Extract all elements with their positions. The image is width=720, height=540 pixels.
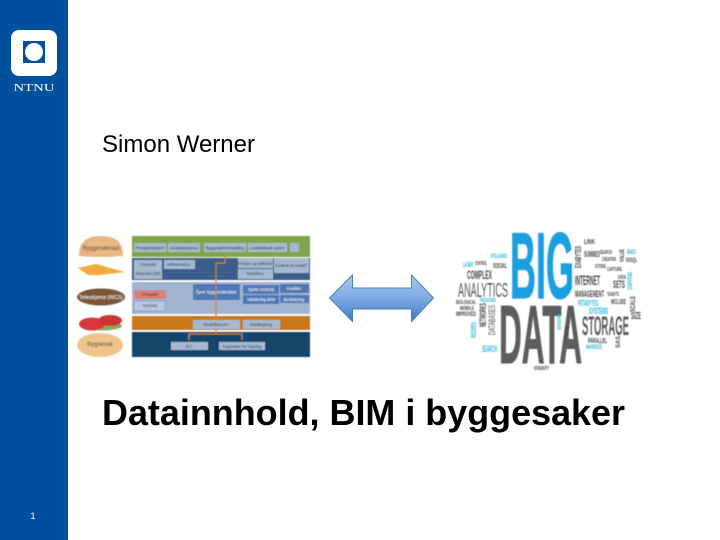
cyan words: RECORDS (471, 322, 478, 338)
top bun: Byggesøknad (83, 246, 119, 252)
burger illustration (77, 236, 125, 357)
page number: 1 (30, 511, 36, 521)
surrounding words: PARALLEL (588, 338, 607, 345)
big data word cloud: BIG (510, 213, 574, 318)
title: Datainnhold, BIM i byggesaker (102, 392, 625, 433)
bottom bun: Bygsesak (87, 342, 114, 348)
surrounding words: CREATION (602, 257, 616, 263)
author name: Simon Werner (102, 131, 255, 158)
surrounding words: DATA (618, 275, 626, 281)
green layer: Landsdekkende system (250, 246, 285, 250)
slide canvas: SIZE (631, 311, 641, 322)
sidebar (0, 0, 68, 540)
slide canvas: STORAGE (582, 311, 629, 341)
surrounding words: BIOLOGICAL (456, 300, 476, 306)
cyan words: BIG (627, 250, 636, 256)
orange layer: Datalagring (250, 322, 273, 327)
dark blue layer: Tellesystem (BIM) (136, 271, 161, 276)
light blue layer: Verktøy (143, 303, 158, 308)
double arrow (330, 275, 434, 322)
surrounding words: LARGE (565, 325, 571, 340)
big data word cloud (456, 213, 641, 381)
cyan words: COMPUTING (628, 272, 634, 290)
surrounding words: COMPLEX (467, 268, 492, 282)
patty: Telleskjema (WCS) (79, 295, 123, 301)
cyan words: PETABYTES (578, 299, 598, 308)
surrounding words: DIVERSITY (534, 366, 549, 372)
dark blue layer: Innsyn og søknad (238, 261, 273, 266)
light blue layer: Prosjekt (142, 292, 159, 297)
NTNU logo: NTNU (14, 83, 55, 94)
navy layer: IFC (185, 344, 193, 349)
architecture diagram (132, 236, 310, 357)
light blue layer (132, 282, 310, 314)
surrounding words: SUMMED (584, 250, 600, 259)
surrounding words: NOSQL (626, 258, 637, 264)
surrounding words: STORE (595, 264, 606, 270)
surrounding words: NETWORKS (478, 303, 488, 327)
surrounding words: INCLUDE (611, 299, 626, 306)
surrounding words: MOBILE (460, 306, 474, 312)
cyan words: SENSORS (557, 314, 563, 330)
surrounding words: VALUE (620, 249, 626, 262)
light blue layer: Sjekk innhold (248, 287, 275, 292)
surrounding words: EXABYTES (574, 246, 583, 268)
dark blue layer: Matrikkel (246, 271, 264, 276)
light blue layer: Validering BIM (247, 297, 275, 302)
dark blue layer: Oversikt (140, 262, 157, 267)
surrounding words: TERABYTE (607, 292, 619, 298)
surrounding words: ANALYTICS (458, 280, 508, 302)
light blue layer: Beslutning (284, 297, 305, 302)
orange layer (132, 316, 310, 330)
surrounding words: LINK (584, 239, 595, 246)
green layer: Byggesaksbehandling (206, 246, 244, 250)
dark blue layer: Kontroll av modell (276, 263, 307, 268)
light blue layer: Åpne byggesaksdata (195, 290, 237, 294)
big data word cloud: DATA (499, 288, 582, 381)
surrounding words: SEARCH (600, 250, 612, 256)
cyan words: SYSTEMS (589, 306, 608, 316)
surrounding words: SAS (616, 336, 622, 348)
cheese (78, 264, 125, 275)
surrounding words: DATABASES (487, 305, 497, 335)
navy layer: Kapasitet for lagring (222, 344, 262, 349)
surrounding words: CONTROL (475, 261, 487, 267)
pepperoni and lettuce (79, 315, 122, 330)
surrounding words: SCALE (630, 296, 637, 312)
light blue layer: Kvalitet (287, 286, 302, 291)
connector lines (189, 257, 242, 340)
cyan words: MARKED (586, 345, 602, 351)
dark blue layer (132, 258, 310, 280)
green layer: Prosjektsystem (136, 246, 165, 250)
cyan words: SEARCH (482, 344, 497, 354)
navy layer (132, 332, 310, 357)
NTNU logo (11, 30, 57, 94)
dark blue layer: Infrastruktur (167, 262, 191, 267)
cyan words: PROCESSING (480, 298, 496, 304)
surrounding words (456, 239, 641, 372)
orange layer: Modellserver (203, 322, 229, 327)
surrounding words: CAPTURE (607, 267, 622, 273)
green layer: Arkivdatasystemer (170, 246, 199, 250)
green layer (132, 236, 310, 257)
surrounding words: IMPROVED (456, 312, 476, 318)
cyan words: INTELLIGENCE (491, 254, 507, 260)
cyan words: LASER (463, 262, 473, 269)
surrounding words: SETS (613, 279, 625, 291)
surrounding words: SOCIAL (493, 263, 507, 270)
cyan words (463, 250, 636, 354)
surrounding words: INTERNET (575, 272, 600, 288)
surrounding words: MANAGEMENT (575, 289, 604, 299)
